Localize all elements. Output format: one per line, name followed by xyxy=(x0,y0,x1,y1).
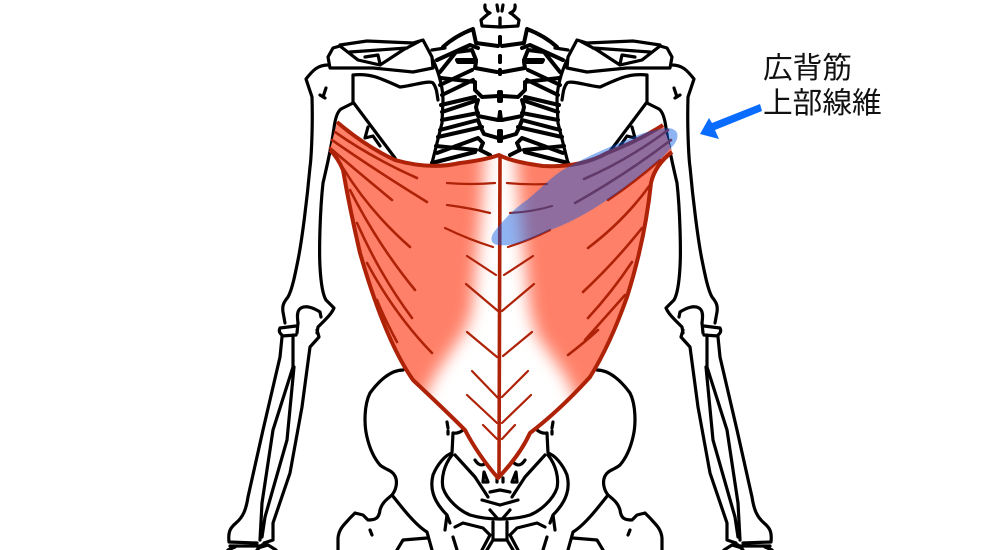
left radius and ulna xyxy=(229,323,319,550)
label xyxy=(763,52,882,120)
left pelvis xyxy=(338,370,500,550)
left humerus xyxy=(283,65,353,333)
left cervical vertebra xyxy=(481,5,500,27)
label line 1: 広背筋 xyxy=(763,52,852,85)
left wrist bones xyxy=(228,545,262,550)
latissimus dorsi muscle xyxy=(330,122,672,520)
left clavicle and scapula xyxy=(328,40,445,163)
label line 2: 上部線維 xyxy=(763,87,882,120)
right half of skeleton xyxy=(499,5,772,550)
left ribs and vertebrae xyxy=(432,29,501,163)
left half of skeleton xyxy=(228,5,501,550)
central spine line xyxy=(499,155,500,478)
white aponeurosis gradient xyxy=(418,157,582,474)
muscle fill xyxy=(330,122,672,478)
arrow xyxy=(700,104,762,139)
muscle outline xyxy=(330,122,672,478)
tendon lines xyxy=(445,183,552,439)
anatomy illustration xyxy=(226,3,881,550)
highlighted upper fibres shape xyxy=(492,128,677,245)
muscle fibres xyxy=(330,130,671,355)
skeleton xyxy=(228,5,772,550)
